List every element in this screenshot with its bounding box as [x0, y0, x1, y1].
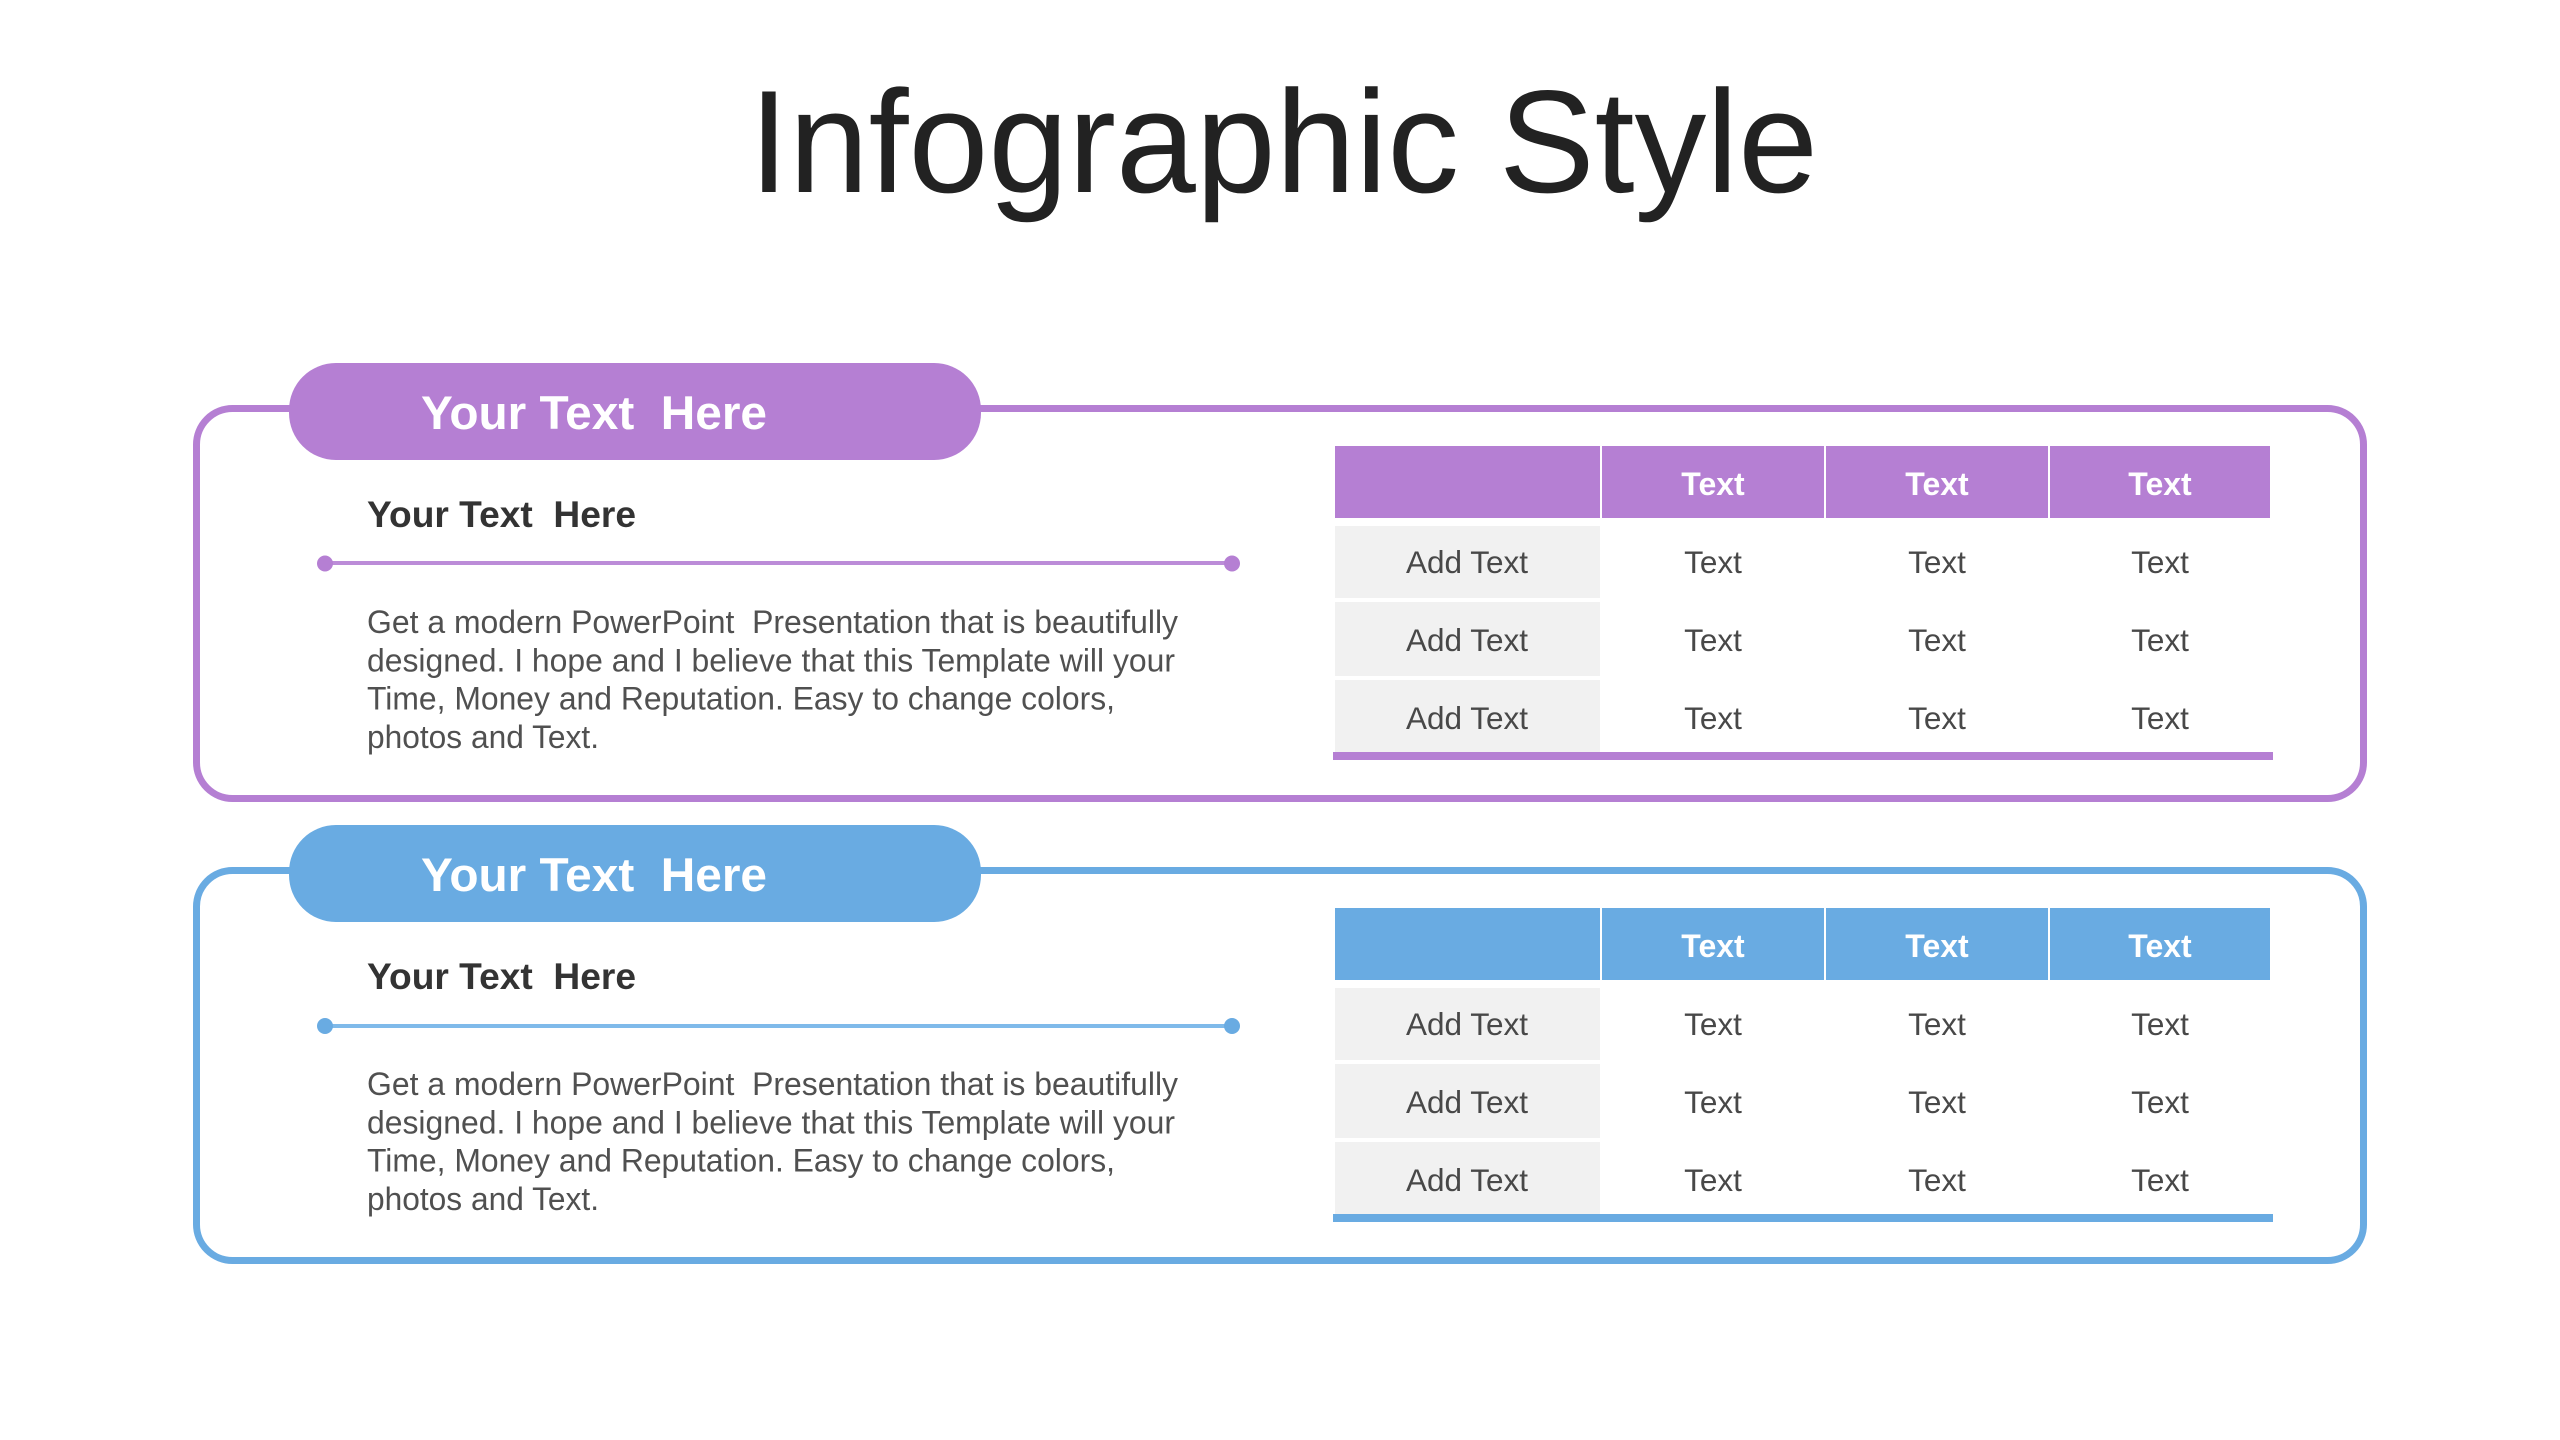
row 3: Add Text [1406, 700, 1528, 736]
table header row: Text [1905, 466, 1969, 502]
body text: photos and Text. [367, 719, 599, 755]
table header row [1335, 446, 2270, 518]
subheading: Your Text Here [367, 494, 636, 535]
table header row: Text [2128, 928, 2192, 964]
row 3: Add Text [1406, 1162, 1528, 1198]
body text: designed. I hope and I believe that this Template will your [367, 1104, 1175, 1140]
panel: purple section [196, 363, 2364, 798]
body text: Time, Money and Reputation. Easy to change colors, [367, 680, 1115, 716]
row 3: Text [2131, 700, 2189, 736]
body text: designed. I hope and I believe that this Template will your [367, 642, 1175, 678]
table header row: Text [1681, 466, 1745, 502]
body text [367, 604, 1178, 755]
row 2: Text [1908, 1084, 1966, 1120]
pill header: Your Text Here [421, 386, 767, 439]
row 3 [1335, 680, 2189, 752]
table bottom rule [1333, 1214, 2273, 1222]
table header row: Text [1681, 928, 1745, 964]
row 2: Add Text [1406, 1084, 1528, 1120]
pill header [289, 363, 981, 460]
divider with end dots [317, 1018, 1240, 1034]
table header row [1335, 908, 2270, 980]
table header row: Text [2128, 466, 2192, 502]
table [1333, 446, 2273, 760]
row 2 [1335, 1064, 2189, 1138]
table header row: Text [1905, 928, 1969, 964]
pill header [289, 825, 981, 922]
row 2: Text [2131, 622, 2189, 658]
row 1: Text [2131, 544, 2189, 580]
row 1 [1335, 526, 2189, 598]
row 3 [1335, 1142, 2189, 1214]
table bottom rule [1333, 752, 2273, 760]
divider with end dots [317, 556, 1240, 572]
row 1: Text [1684, 1006, 1742, 1042]
row 1: Add Text [1406, 1006, 1528, 1042]
body text: Get a modern PowerPoint Presentation that is beautifully [367, 604, 1178, 640]
row 1: Text [2131, 1006, 2189, 1042]
table [1333, 908, 2273, 1222]
pill header: Your Text Here [421, 848, 767, 901]
body text [367, 1066, 1178, 1217]
body text: Time, Money and Reputation. Easy to change colors, [367, 1142, 1115, 1178]
row 1: Text [1684, 544, 1742, 580]
row 3: Text [1684, 700, 1742, 736]
title: Infographic Style [749, 60, 1818, 223]
subheading: Your Text Here [367, 956, 636, 997]
row 3: Text [2131, 1162, 2189, 1198]
panel: blue section [196, 825, 2364, 1260]
row 1: Add Text [1406, 544, 1528, 580]
body text: Get a modern PowerPoint Presentation that is beautifully [367, 1066, 1178, 1102]
panel outline [196, 408, 2364, 798]
row 2: Text [1684, 622, 1742, 658]
row 3: Text [1908, 700, 1966, 736]
row 2: Text [2131, 1084, 2189, 1120]
row 2: Add Text [1406, 622, 1528, 658]
row 3: Text [1684, 1162, 1742, 1198]
row 1: Text [1908, 544, 1966, 580]
row 2: Text [1684, 1084, 1742, 1120]
row 2 [1335, 602, 2189, 676]
body text: photos and Text. [367, 1181, 599, 1217]
row 1: Text [1908, 1006, 1966, 1042]
panel outline [196, 870, 2364, 1260]
row 3: Text [1908, 1162, 1966, 1198]
row 2: Text [1908, 622, 1966, 658]
row 1 [1335, 988, 2189, 1060]
